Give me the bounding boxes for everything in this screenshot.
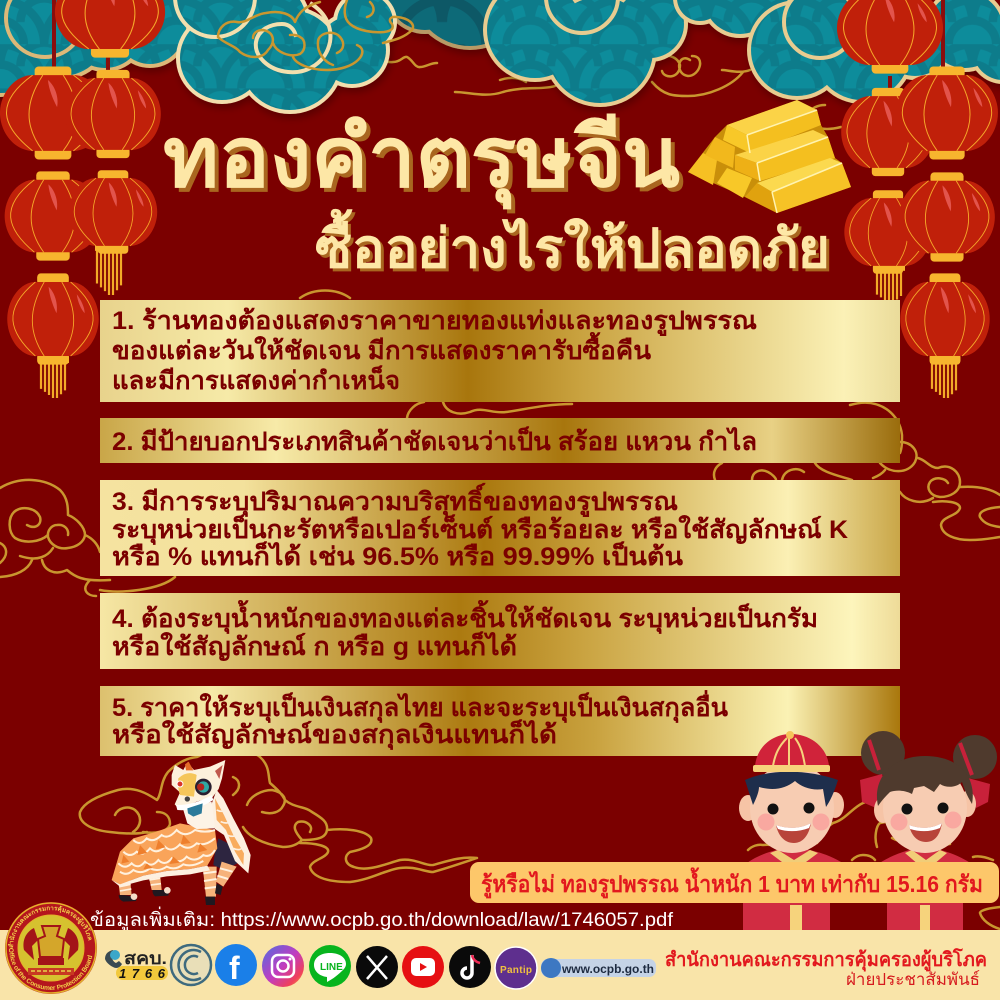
left lanterns xyxy=(0,0,165,398)
panel: tip 5: หรือใช้สัญลักษณ์ของสกุลเงินแทนก็ได้ xyxy=(112,719,557,751)
hotline logo xyxy=(105,949,168,981)
cloud: top left xyxy=(0,0,190,97)
website badge: www.ocpb.go.th xyxy=(561,964,654,976)
icon: facebook: f xyxy=(229,950,240,986)
lantern ropes xyxy=(54,0,108,72)
panel: tip 2: 2. มีป้ายบอกประเภทสินค้าชัดเจนว่าเป็น สร้อย แหวน กำไล xyxy=(112,426,757,456)
lantern: back column 3 xyxy=(7,273,99,398)
lion cape xyxy=(112,823,217,887)
icon: youtube xyxy=(402,946,444,988)
boy hat xyxy=(753,731,830,772)
icon: x xyxy=(356,946,398,988)
lantern: back middle xyxy=(841,88,935,176)
lion front legs xyxy=(203,838,237,905)
panel: tip 3: ระบุหน่วยเป็นกะรัตหรือเปอร์เซ็นต์ หรือร้อยละ หรือใช้สัญลักษณ์ K xyxy=(112,514,848,546)
website badge xyxy=(541,958,656,978)
panel: tip 4 xyxy=(100,593,900,669)
agency name: สำนักงานคณะกรรมการคุ้มครองผู้บริโภค xyxy=(665,948,987,973)
panel: tip 3: หรือ % แทนก็ได้ เช่น 96.5% หรือ 99.99% เป็นต้น xyxy=(112,541,683,571)
footer band xyxy=(0,930,1000,1000)
icon: line: LINE xyxy=(320,962,343,973)
illustration: boy xyxy=(739,731,847,930)
icon: pantip xyxy=(495,947,537,989)
lantern ropes xyxy=(890,0,943,92)
illustration: lion dance xyxy=(112,760,251,905)
lantern: front middle xyxy=(65,70,161,158)
subtitle: ซื้ออย่างไรให้ปลอดภัย xyxy=(318,212,833,282)
panel: tip 5: 5. ราคาให้ระบุเป็นเงินสกุลไทย และจะระบุเป็นเงินสกุลอื่น xyxy=(112,690,728,724)
cloud: left-centre overlap xyxy=(173,0,257,39)
panel: tip 4: 4. ต้องระบุน้ำหนักของทองแต่ละชิ้นให้ชัดเจน ระบุหน่วยเป็นกรัม xyxy=(112,599,818,635)
icon: gold bars xyxy=(688,100,851,213)
lantern: front top xyxy=(896,66,998,160)
panel: tip 2 xyxy=(100,418,900,463)
panel: tip 1: ของแต่ละวันให้ชัดเจน มีการแสดงราคารับซื้อคืน xyxy=(112,331,651,365)
hotline logo: 1766 xyxy=(119,966,166,981)
lion head xyxy=(172,760,225,817)
panel: tip 4: หรือใช้สัญลักษณ์ ก หรือ g แทนก็ได้ xyxy=(112,631,517,661)
panel: tip 1 xyxy=(100,300,900,402)
lantern: back bottom xyxy=(844,190,932,303)
cloud: top small xyxy=(673,0,794,38)
icon: facebook xyxy=(215,944,257,986)
hotline logo: สคบ. xyxy=(124,949,167,968)
subtitle: ซื้ออย่างไรให้ปลอดภัย xyxy=(315,209,830,279)
icon: OCPB xyxy=(171,945,211,985)
emblem: Office of the Consumer Protection Board xyxy=(9,948,92,990)
source link: ข้อมูลเพิ่มเติม: https://www.ocpb.go.th/download/law/1746057.pdf xyxy=(90,906,674,931)
lantern: front middle xyxy=(899,172,995,262)
cloud: left-centre xyxy=(176,0,397,114)
right lanterns xyxy=(837,0,998,398)
icon: pantip: Pantip xyxy=(500,965,532,976)
panel: tip 1: และมีการแสดงค่ากำเหน็จ xyxy=(112,365,400,395)
lion chest xyxy=(183,802,215,829)
title: ทองคำตรุษจีน xyxy=(163,110,680,210)
lantern: front bottom xyxy=(69,170,157,295)
panel: tip 3 xyxy=(100,480,900,576)
illustration: girl xyxy=(860,731,997,930)
icon: line xyxy=(309,945,351,987)
panel: tip 1: 1. ร้านทองต้องแสดงราคาขายทองแท่งและทองรูปพรรณ xyxy=(112,307,757,337)
cloud: top dark xyxy=(383,0,532,50)
lantern: front bottom xyxy=(900,273,990,398)
icon: tiktok xyxy=(449,946,491,988)
lion mane xyxy=(210,790,251,873)
panel: teal clouds xyxy=(0,0,1000,114)
callout xyxy=(470,862,999,903)
emblem xyxy=(5,902,97,994)
lantern: back column 1 xyxy=(0,66,106,160)
emblem: สำนักงานคณะกรรมการคุ้มครองผู้บริโภค xyxy=(8,906,92,948)
title: ทองคำตรุษจีน xyxy=(167,114,684,214)
panel: tip 5 xyxy=(100,686,900,756)
lantern: front top xyxy=(55,0,165,58)
department: ฝ่ายประชาสัมพันธ์ xyxy=(846,970,980,989)
swirl over clouds xyxy=(218,0,413,70)
cloud: centre right xyxy=(483,0,688,107)
cloud ring xyxy=(256,3,330,72)
panel: tip 3: 3. มีการระบุปริมาณความบริสุทธิ์ของทองรูปพรรณ xyxy=(112,482,678,518)
lion back legs xyxy=(118,873,171,902)
lantern: back top xyxy=(837,0,943,74)
lantern: back column 2 xyxy=(5,171,101,261)
cloud: right xyxy=(747,0,1000,104)
